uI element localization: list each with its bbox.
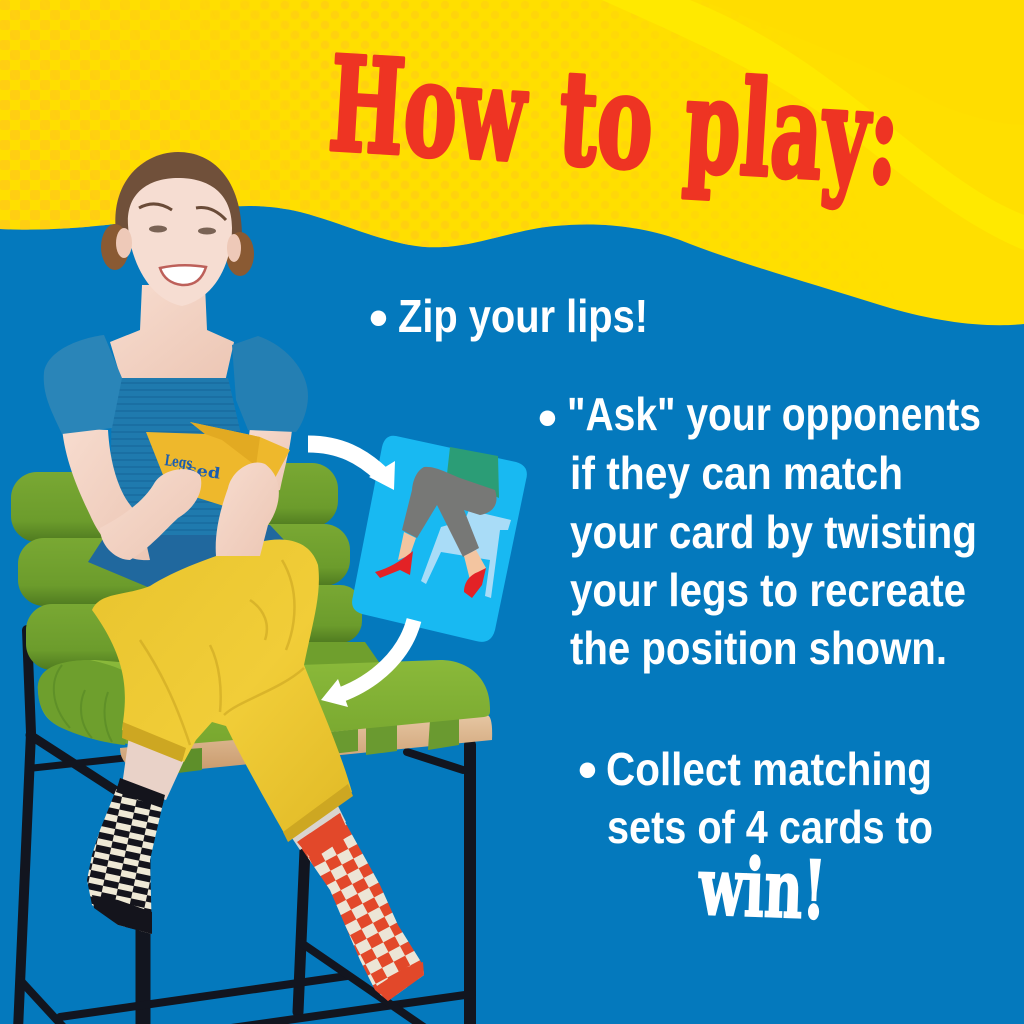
chair: green seat cushion <box>38 660 490 746</box>
black sock cuff and toe <box>92 778 165 934</box>
bullet: ask opponents: your card by twisting <box>570 506 977 558</box>
arrow: hands to card <box>308 444 395 490</box>
yellow trousers <box>92 540 352 840</box>
red shoes <box>375 551 486 598</box>
bullet: ask opponents: your legs to recreate <box>570 564 966 616</box>
title: How <box>325 27 532 192</box>
hair <box>115 152 242 248</box>
black and white checkered sock <box>87 780 165 934</box>
right ankle <box>292 806 346 850</box>
right forearm and hand <box>216 462 279 556</box>
playing cards in hands: Legs <box>163 451 194 473</box>
yellow wavy header band <box>0 0 1024 340</box>
ankles <box>398 532 486 580</box>
trouser folds <box>140 560 304 745</box>
win: win! <box>697 839 828 937</box>
chair: green back cushions <box>11 463 383 670</box>
neck and chest <box>110 285 234 382</box>
bullet: collect sets: Collect matching <box>606 743 932 795</box>
title: to <box>555 41 658 199</box>
bullet: collect sets: sets of 4 cards to <box>607 801 933 853</box>
bullet: ask opponents: if they can match <box>570 447 903 499</box>
playing cards in hands <box>146 422 290 506</box>
grey crossed legs <box>402 467 497 557</box>
blue peplum <box>88 525 286 588</box>
bullet: collect sets: • <box>578 740 597 800</box>
green shirt <box>447 447 499 498</box>
instructions text <box>369 288 981 937</box>
bullet: ask opponents: the position shown. <box>570 622 947 674</box>
stool <box>421 510 511 598</box>
puff sleeves <box>44 335 122 434</box>
eyes and brows <box>139 204 226 234</box>
bullet: ask opponents: • <box>538 388 557 448</box>
bullet: ask opponents <box>538 388 981 674</box>
red checkered sock <box>297 813 424 1001</box>
hair buns <box>101 224 254 276</box>
red sock cuff and toe <box>297 813 424 1001</box>
playing cards in hands: sed <box>185 460 222 483</box>
bullet: zip your lips: Zip your lips! <box>398 290 648 342</box>
chair frame <box>18 630 472 1024</box>
upper arms <box>62 428 150 560</box>
smocked bodice <box>110 378 246 535</box>
bullet: zip your lips: • <box>369 288 388 348</box>
arrow: card to chair <box>321 620 414 707</box>
girl <box>44 152 424 1001</box>
example card <box>352 436 527 642</box>
face <box>128 178 232 306</box>
smile <box>160 265 206 285</box>
left forearm and hand <box>100 469 201 560</box>
bullet: zip your lips <box>369 288 648 348</box>
chair: wooden seat rail with straps <box>120 715 492 773</box>
title <box>325 27 903 214</box>
ears <box>116 228 241 262</box>
left shin <box>122 728 188 800</box>
bullet: collect sets <box>578 740 933 853</box>
